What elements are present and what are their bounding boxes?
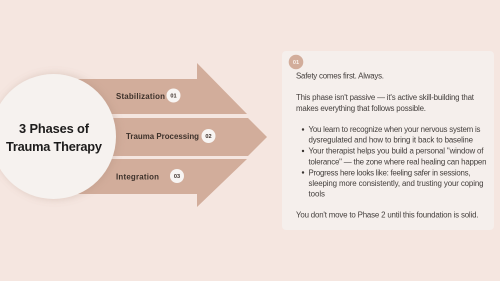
label: Trauma Processing	[126, 129, 216, 143]
bullet list: sleeping more consistently, and trusting your coping	[308, 179, 484, 188]
title: 3 Phases of	[19, 121, 90, 136]
badge: panel 01: 01	[293, 60, 299, 66]
bullet list: dysregulated and how to bring it back to baseline	[308, 136, 474, 144]
arrow: Integration	[60, 159, 247, 207]
diagram: three arrows and title circle	[0, 63, 267, 207]
text: closing: You don't move to Phase 2 until this foundation is solid.	[296, 210, 478, 220]
panel: phase 1 details	[282, 51, 494, 230]
bullet list: Progress here looks like: feeling safer in sessions,	[308, 168, 470, 178]
title circle	[0, 74, 116, 199]
label: Integration	[116, 169, 184, 183]
label: Stabilization: Stabilization	[116, 92, 165, 101]
bullet list: Your therapist helps you build a personal "window of	[308, 146, 484, 156]
badge: 02: 02	[205, 134, 212, 140]
arrow: Stabilization	[60, 63, 247, 114]
text: paragraph: This phase isn't passive — it's active skill-building that	[296, 93, 475, 102]
text: paragraph: makes everything that follows possible.	[296, 104, 426, 113]
text: intro: Safety comes first. Always.	[296, 72, 384, 80]
bullet list: tools	[308, 190, 325, 198]
bullet list: You learn to recognize when your nervous system is	[308, 125, 481, 134]
title: Trauma Therapy	[6, 139, 103, 154]
arrow: Trauma Processing	[60, 118, 267, 156]
badge: 03: 03	[174, 174, 180, 180]
label: Trauma Processing: Trauma Processing	[126, 132, 199, 141]
badge: 01: 01	[170, 94, 177, 100]
label: Integration: Integration	[116, 172, 159, 182]
badge: panel 01	[289, 55, 303, 69]
bullet list	[302, 125, 486, 198]
bullet list: tolerance" — the zone where real healing can happen	[308, 158, 486, 166]
circle shadow	[0, 74, 118, 200]
label: Stabilization	[116, 88, 180, 102]
